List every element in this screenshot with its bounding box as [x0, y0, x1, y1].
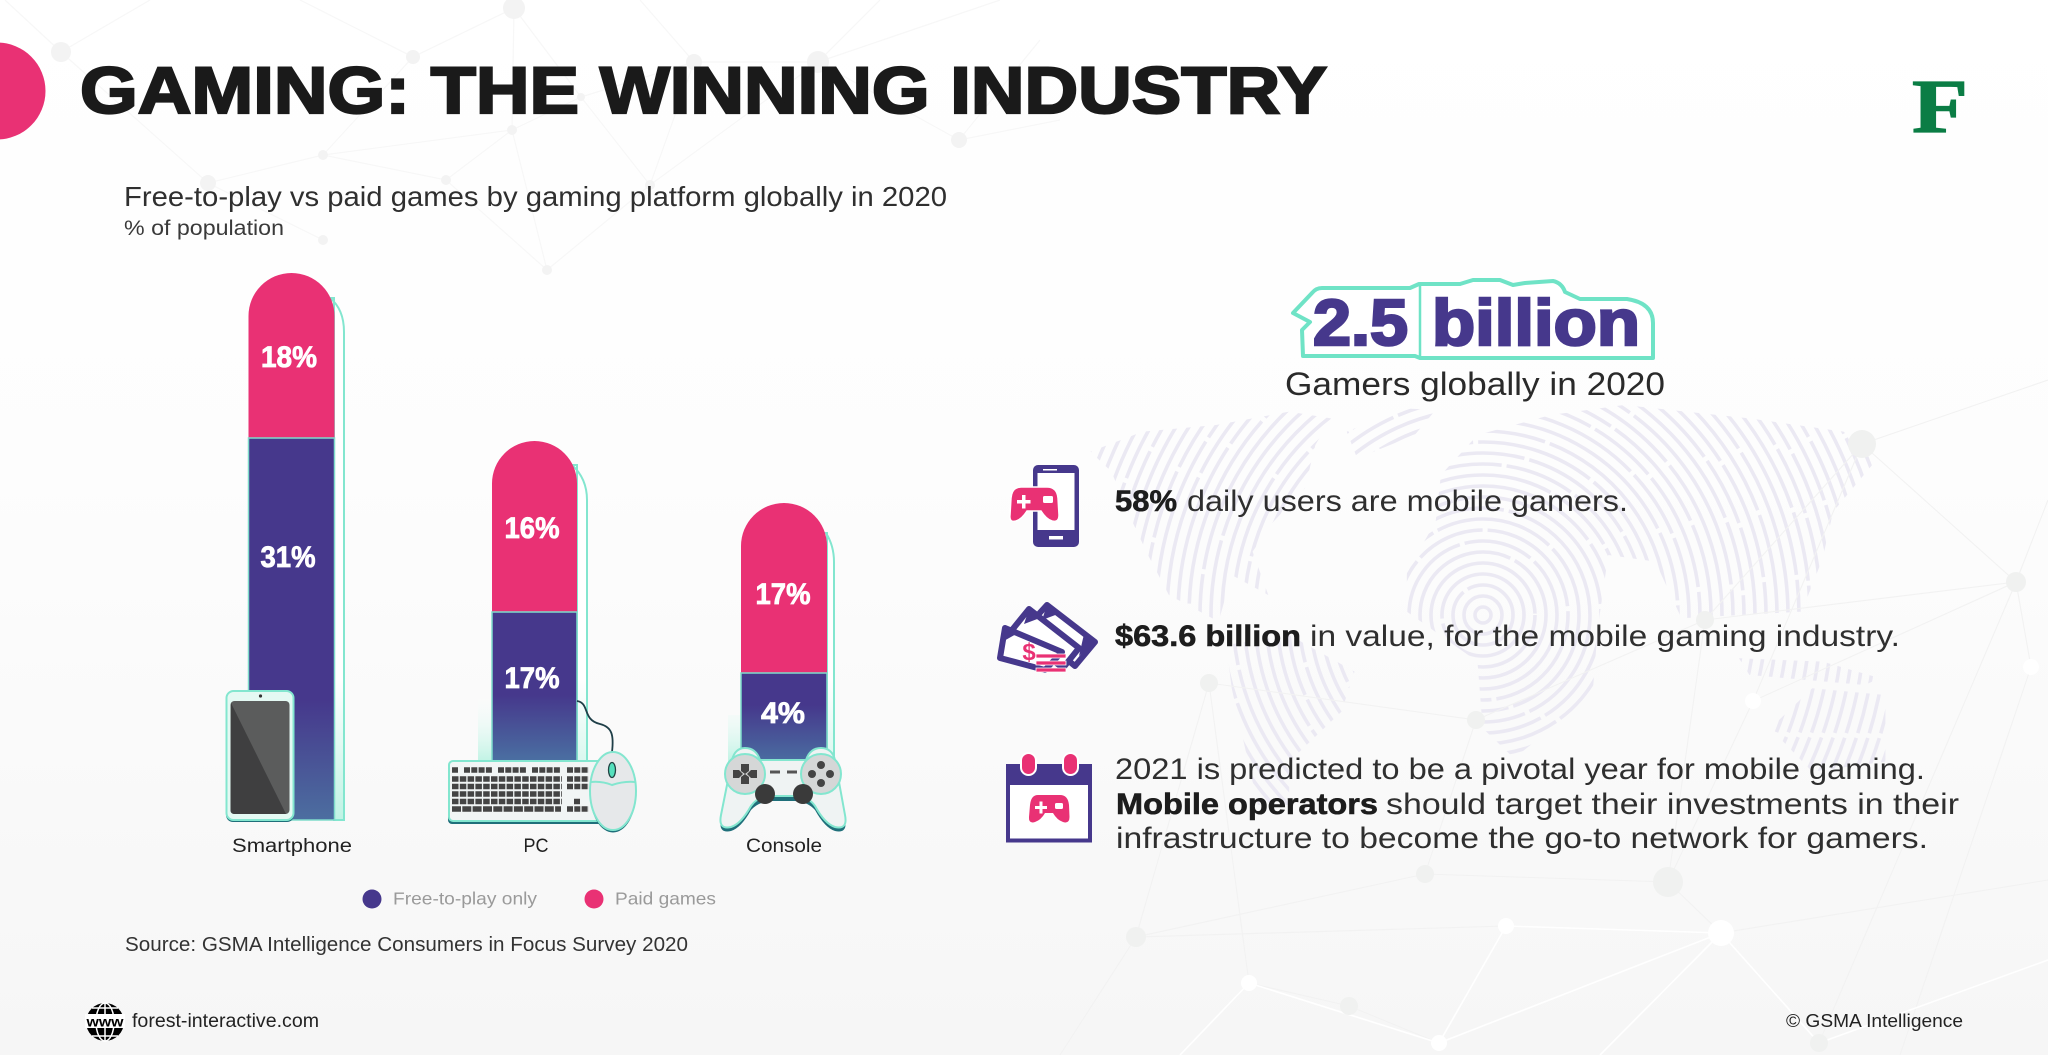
source note: Source: GSMA Intelligence Consumers in Focus Survey 2020: [125, 934, 688, 956]
stat text: daily users are mobile gamers.: [1187, 485, 1628, 518]
value: 17%: 17%: [756, 578, 810, 611]
bar: Console: [728, 503, 834, 765]
bar: Smartphone: [248, 273, 344, 820]
prediction text: Mobile operators: [1116, 788, 1378, 821]
prediction text: 2021 is predicted to be a pivotal year for mobile gaming.: [1115, 753, 1925, 786]
value: 17%: 17%: [504, 662, 560, 695]
category label: Console: Console: [746, 836, 822, 857]
prediction text: infrastructure to become the go-to network for gamers.: [1116, 822, 1928, 855]
icon: banknotes: $: [1022, 639, 1036, 666]
stat: $63.6 billion value: [1000, 605, 1900, 672]
logo: Forbes F: F: [1912, 64, 1968, 149]
stacked bar chart: [226, 273, 846, 857]
icon: www globe: www: [85, 1014, 124, 1030]
icon: banknotes: [1000, 605, 1095, 672]
headline: 2.5 billion: billion: [1432, 286, 1640, 359]
prediction text: should target their investments in their: [1386, 788, 1959, 821]
background: fingerprint world map: [1090, 405, 1886, 805]
category label: PC: PC: [524, 836, 548, 857]
subheading: Gamers globally in 2020: [1285, 366, 1665, 402]
chart title: Free-to-play vs paid games by gaming platform globally in 2020: [124, 181, 947, 212]
value: 31%: 31%: [260, 541, 316, 574]
icon: calendar with gamepad: [1006, 753, 1092, 840]
copyright: © GSMA Intelligence: [1786, 1011, 1963, 1031]
outlined headline badge: [1293, 280, 1653, 358]
headline: 2.5 billion: 2.5: [1313, 286, 1408, 359]
stat: 58% daily mobile gamers: [1010, 465, 1628, 547]
title: GAMING: THE WINNING INDUSTRY: [80, 53, 1327, 127]
stat text: [1115, 620, 1900, 653]
bar: PC: [478, 441, 587, 762]
icon: phone with gamepad: [1010, 465, 1079, 547]
icon: www globe: [85, 1003, 125, 1041]
value: 16%: 16%: [504, 512, 560, 545]
legend: [362, 888, 716, 908]
website footer: [85, 1003, 319, 1041]
legend item: Free-to-play only: Free-to-play only: [393, 888, 537, 908]
website url: forest-interactive.com: [132, 1011, 319, 1032]
header accent: pink circle: [0, 42, 46, 140]
icon: mouse with cable: [577, 701, 636, 832]
chart heading: [124, 181, 947, 240]
chart subtitle: % of population: [124, 217, 284, 240]
value: 18%: 18%: [261, 341, 317, 374]
headline: 2.5 billion: [1313, 286, 1640, 359]
icon: keyboard: [448, 761, 604, 824]
icon: game controller: [720, 748, 846, 832]
value: 4%: 4%: [761, 697, 805, 730]
callout: 2.5 billion gamers: [1285, 280, 1665, 402]
stat text: $63.6 billion: [1115, 620, 1301, 653]
prediction text: [1115, 753, 1959, 855]
icon: smartphone: [226, 691, 294, 822]
stat: 2021 prediction: [1006, 753, 1959, 855]
stat text: 58%: [1115, 485, 1177, 518]
legend item: Paid games: Paid games: [615, 888, 716, 908]
category label: Smartphone: Smartphone: [232, 836, 352, 857]
stat text: in value, for the mobile gaming industry.: [1310, 620, 1900, 653]
